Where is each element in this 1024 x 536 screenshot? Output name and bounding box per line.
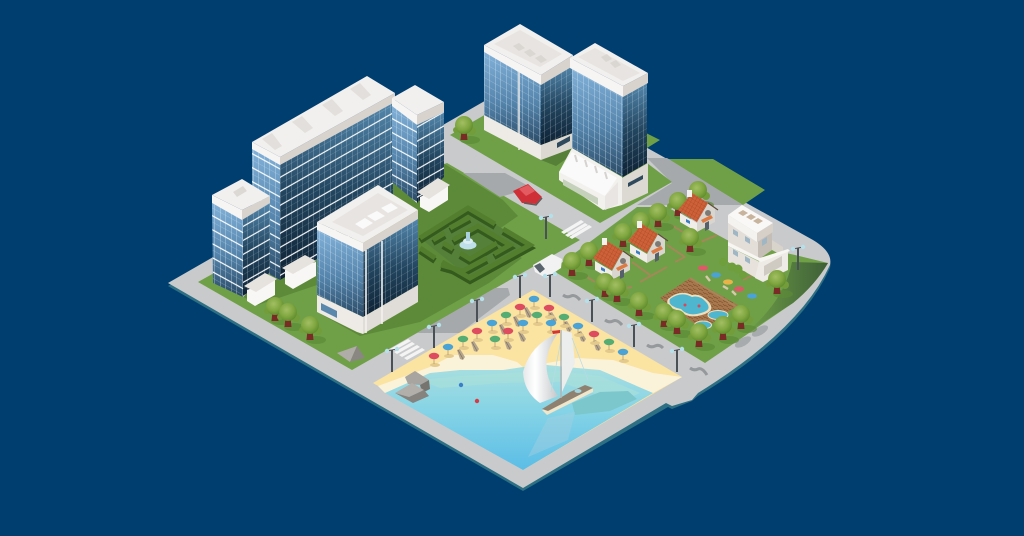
- building: top tower right: [559, 43, 648, 210]
- lot: houses: [552, 207, 828, 363]
- upper right wall: [758, 232, 772, 260]
- canopy: [417, 178, 450, 212]
- pillars: [366, 241, 382, 333]
- pillar: [518, 72, 520, 150]
- far green wedge: [667, 159, 765, 205]
- base right: [622, 163, 648, 205]
- windows: [733, 229, 767, 264]
- swimmers: [684, 304, 686, 306]
- dirt patio: [660, 278, 738, 330]
- trees behind houses: [561, 181, 714, 280]
- canopy: [282, 255, 316, 289]
- lot: top right buildings: [450, 106, 672, 223]
- rigging: [551, 338, 588, 392]
- dark crescent: [745, 262, 828, 334]
- red car: [513, 184, 542, 205]
- mast: [560, 330, 562, 398]
- building: small tower left: [212, 179, 277, 306]
- road shadow upper right: [637, 158, 743, 205]
- rock on lawn: [337, 346, 365, 362]
- boat shadow on water: [572, 391, 637, 415]
- base window: [321, 303, 337, 318]
- building: tower right: [392, 85, 450, 212]
- slab shadows: [733, 323, 770, 350]
- lamp shadows: [563, 295, 707, 375]
- base: [317, 295, 363, 334]
- porch: [559, 148, 622, 210]
- gray slab: [168, 79, 830, 488]
- small sail: [562, 330, 575, 392]
- lot: park left: [198, 163, 580, 370]
- sailboat: [523, 330, 593, 415]
- roof units: [601, 54, 621, 68]
- roof unit: [233, 186, 247, 197]
- houses: [593, 190, 718, 280]
- sunshades: [698, 265, 708, 271]
- crosswalk bottom: [390, 339, 425, 360]
- roof vents: [738, 210, 763, 224]
- roof inset: [332, 193, 408, 236]
- apartment building: [728, 205, 790, 282]
- hedge tops: [420, 208, 530, 278]
- canopy: [244, 273, 277, 306]
- fences: [587, 225, 753, 307]
- slab edge: [168, 82, 830, 491]
- porch right: [755, 250, 788, 282]
- crosswalk top: [561, 220, 592, 239]
- parapet: [728, 215, 757, 242]
- building: top tower left: [484, 24, 573, 160]
- water: [385, 365, 653, 470]
- roof units: [262, 83, 371, 150]
- road shadow top: [463, 173, 532, 197]
- upper left wall: [728, 223, 758, 260]
- wet sand: [378, 355, 682, 393]
- base windows: [628, 175, 643, 187]
- rocks: [395, 371, 430, 403]
- deck hatch: [574, 389, 582, 393]
- roof inset: [578, 48, 640, 81]
- fountain: [460, 232, 476, 250]
- main pool: [667, 293, 711, 316]
- hedge maze: [420, 208, 530, 281]
- lot shadow: [541, 146, 576, 166]
- hull: [542, 388, 593, 415]
- maze ground: [420, 208, 530, 278]
- building: front tower: [317, 185, 418, 334]
- road shadow lower: [417, 288, 510, 333]
- big sail: [523, 333, 558, 403]
- small pools: [708, 310, 728, 320]
- white van: [533, 254, 562, 278]
- base windows: [557, 136, 570, 148]
- building: rear long tower: [252, 76, 395, 289]
- trees: [264, 116, 793, 351]
- street lamps: [385, 214, 805, 375]
- pool area: [660, 265, 757, 330]
- roof units: [355, 203, 398, 229]
- floor band: [728, 242, 790, 262]
- buoys: [459, 383, 479, 403]
- sun loungers: [706, 276, 736, 295]
- balcony side: [772, 240, 783, 256]
- beach: [373, 290, 682, 470]
- parapet: [317, 222, 363, 252]
- roof inset: [494, 30, 562, 67]
- flag: [552, 330, 560, 334]
- lower left wall: [728, 246, 760, 278]
- hedge sides: [420, 211, 530, 281]
- roof units: [513, 43, 547, 63]
- shallow band: [420, 371, 640, 402]
- umbrellas and loungers: [429, 296, 629, 367]
- building shadow: [240, 163, 522, 336]
- sail reflection: [528, 412, 575, 457]
